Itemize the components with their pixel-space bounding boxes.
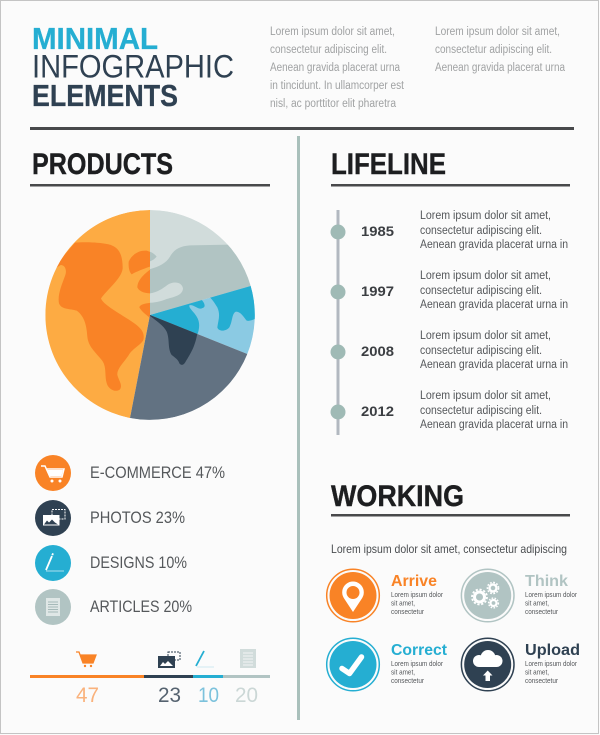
step: upload: sit amet, bbox=[525, 668, 549, 676]
step: think: consectetur bbox=[525, 607, 558, 616]
stacked bar summary: 23 bbox=[158, 684, 181, 707]
icon: cloud upload bbox=[473, 650, 502, 681]
legend: photos bbox=[35, 500, 185, 536]
pie chart with world map bbox=[45, 210, 263, 420]
heading: products: PRODUCTS bbox=[32, 148, 173, 181]
step: think: Think bbox=[525, 573, 568, 590]
title: MINIMAL bbox=[32, 21, 158, 56]
heading: lifeline: LIFELINE bbox=[331, 148, 446, 181]
legend: e-commerce: E-COMMERCE 47% bbox=[90, 463, 225, 482]
legend: designs bbox=[35, 545, 187, 581]
step: upload: Lorem ipsum dolor bbox=[525, 659, 577, 668]
timeline entry 1985: Lorem ipsum dolor sit amet, bbox=[420, 210, 551, 222]
icon: check mark bbox=[342, 657, 362, 674]
icon: pencil bbox=[46, 553, 64, 571]
intro text column 1: Aenean gravida placerat urna bbox=[270, 62, 401, 74]
intro text column 2 bbox=[435, 26, 566, 74]
timeline entry 2008: 2008 bbox=[361, 343, 394, 359]
intro text column 1: Lorem ipsum dolor sit amet, bbox=[270, 26, 395, 38]
timeline entry 2012: Lorem ipsum dolor sit amet, bbox=[420, 390, 551, 402]
title bbox=[32, 21, 234, 113]
stacked bar summary: 20 bbox=[235, 684, 258, 707]
step: think bbox=[461, 569, 577, 622]
timeline entry 2012: 2012 bbox=[361, 403, 394, 419]
timeline entry 2008: Lorem ipsum dolor sit amet, bbox=[420, 330, 551, 342]
icon: map pin bbox=[342, 582, 364, 612]
step: correct: Correct bbox=[391, 642, 448, 659]
timeline entry 1985: consectetur adipiscing elit. bbox=[420, 225, 542, 237]
icon: cart small bbox=[76, 652, 96, 667]
legend: designs: DESIGNS 10% bbox=[90, 553, 187, 572]
step: arrive: Arrive bbox=[391, 573, 437, 590]
working intro text: Lorem ipsum dolor sit amet, consectetur adipiscing bbox=[331, 542, 567, 556]
pie slice: articles 20% bbox=[150, 210, 250, 315]
step: correct bbox=[327, 638, 448, 691]
step: think: sit amet, bbox=[525, 598, 549, 608]
step: upload: consectetur bbox=[525, 676, 558, 685]
icon: photos bbox=[43, 510, 65, 526]
timeline entry 1985 bbox=[330, 210, 568, 251]
intro text column 1 bbox=[270, 26, 405, 110]
icon: document small bbox=[240, 649, 256, 668]
intro text column 1: consectetur adipiscing elit. bbox=[270, 44, 387, 56]
timeline entry 2008 bbox=[330, 330, 568, 371]
stacked bar summary: 10 bbox=[198, 684, 219, 707]
step: correct: sit amet, bbox=[391, 668, 415, 676]
title: INFOGRAPHIC bbox=[32, 48, 234, 84]
intro text column 1: nisl, ac porttitor elit pharetra bbox=[270, 98, 397, 110]
icon: cart bbox=[41, 466, 64, 482]
timeline entry 2012: Aenean gravida placerat urna in bbox=[420, 419, 568, 431]
timeline entry 1997: Lorem ipsum dolor sit amet, bbox=[420, 270, 551, 282]
timeline entry 2008: Aenean gravida placerat urna in bbox=[420, 359, 568, 371]
timeline bbox=[330, 210, 568, 435]
timeline entry 1997 bbox=[330, 270, 568, 311]
icon: document bbox=[46, 598, 60, 616]
step: think: Lorem ipsum dolor bbox=[525, 590, 577, 599]
pie slice: e-commerce 47% bbox=[45, 210, 150, 418]
timeline entry 2012 bbox=[330, 390, 568, 431]
timeline entry 1985: Aenean gravida placerat urna in bbox=[420, 239, 568, 251]
title: ELEMENTS bbox=[32, 78, 178, 113]
intro text column 2: Lorem ipsum dolor sit amet, bbox=[435, 26, 560, 38]
step: arrive: Lorem ipsum dolor bbox=[391, 590, 443, 599]
step: arrive: consectetur bbox=[391, 607, 424, 616]
intro text column 1: in tincidunt. In ullamcorper est bbox=[270, 80, 405, 92]
timeline entry 1997: 1997 bbox=[361, 283, 394, 299]
step: arrive bbox=[327, 569, 443, 622]
pie slice: photos 23% bbox=[130, 315, 248, 420]
timeline entry 2008: consectetur adipiscing elit. bbox=[420, 345, 542, 357]
step: arrive: sit amet, bbox=[391, 598, 415, 608]
intro text column 2: Aenean gravida placerat urna bbox=[435, 62, 566, 74]
icon: photos small bbox=[158, 652, 180, 668]
intro text column 2: consectetur adipiscing elit. bbox=[435, 44, 552, 56]
icon: gears bbox=[472, 582, 499, 608]
step: correct: consectetur bbox=[391, 676, 424, 685]
heading: working: WORKING bbox=[331, 480, 464, 513]
step: upload bbox=[461, 638, 580, 691]
timeline entry 1997: consectetur adipiscing elit. bbox=[420, 285, 542, 297]
step: correct: Lorem ipsum dolor bbox=[391, 659, 443, 668]
stacked bar summary bbox=[30, 649, 270, 707]
stacked bar summary: 47 bbox=[76, 684, 99, 707]
icon: pencil small bbox=[196, 651, 214, 667]
legend: e-commerce bbox=[35, 455, 225, 491]
legend: articles bbox=[35, 589, 192, 625]
pie slice: designs 10% bbox=[150, 286, 255, 354]
timeline entry 2012: consectetur adipiscing elit. bbox=[420, 405, 542, 417]
step: upload: Upload bbox=[525, 642, 580, 659]
timeline entry 1985: 1985 bbox=[361, 223, 394, 239]
legend: photos: PHOTOS 23% bbox=[90, 508, 185, 527]
timeline entry 1997: Aenean gravida placerat urna in bbox=[420, 299, 568, 311]
bar segments bbox=[30, 675, 270, 678]
legend: articles: ARTICLES 20% bbox=[90, 597, 192, 616]
